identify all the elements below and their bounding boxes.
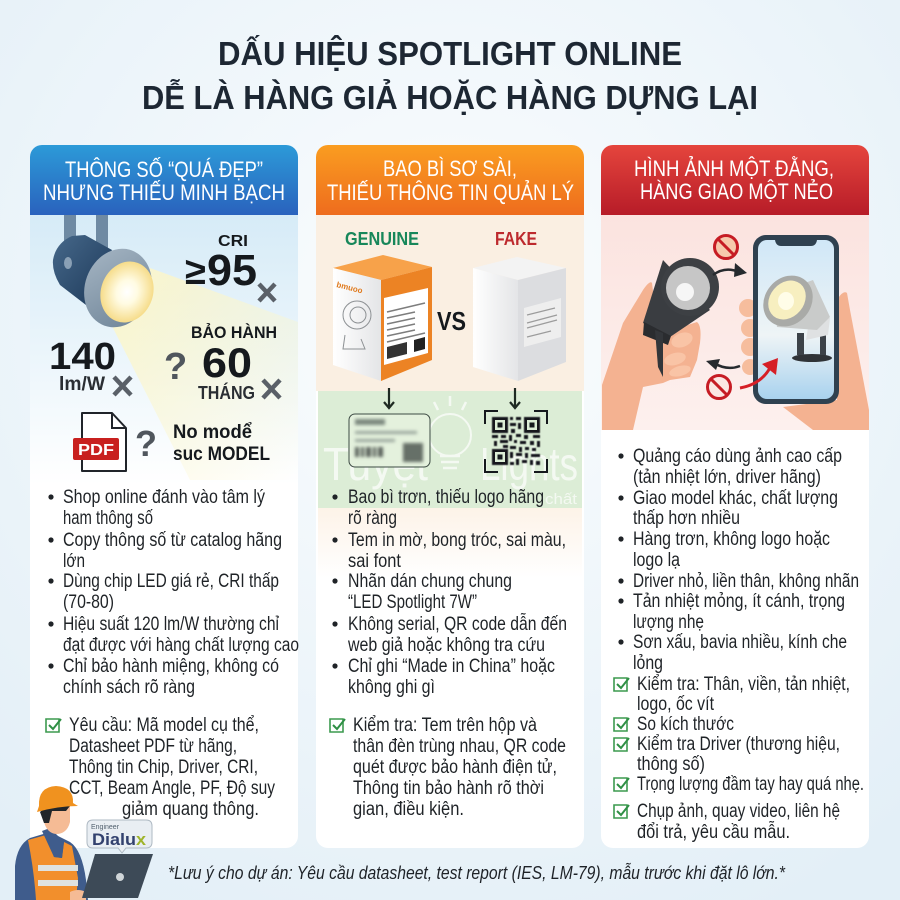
panel: thông số quá đẹp: [30, 145, 299, 848]
panel 3 bullet list: Quảng cáo dùng ảnh cao cấp: [633, 446, 842, 467]
warranty spec: BẢO HÀNH: [191, 323, 277, 342]
panel 3 bullet list: lỏng: [633, 653, 663, 674]
panel 2 check list: gian, điều kiện.: [353, 799, 464, 820]
panel 1 bullet list: [48, 487, 299, 698]
CRI spec: [185, 233, 275, 301]
efficacy spec: [49, 336, 131, 395]
label: genuine: GENUINE: [345, 229, 419, 249]
blurred label: [349, 414, 430, 467]
warranty spec: ?: [164, 346, 187, 388]
panel 2 header: [316, 145, 584, 215]
panel 3 check list: thông số): [637, 754, 705, 775]
panel 1 requirement checklist: Yêu cầu: Mã model cụ thể,: [69, 715, 259, 736]
panel 3 check list: So kích thước: [637, 714, 734, 735]
panel 2 bullet list: sai font: [348, 551, 402, 572]
panel 3 header: [601, 145, 869, 215]
panel 3 bullet list: logo lạ: [633, 550, 680, 571]
illustration: phone with product photo: [739, 235, 869, 430]
panel 3 check list: Kiểm tra: Thân, viền, tản nhiệt,: [637, 674, 850, 695]
efficacy spec: 140: [49, 336, 116, 378]
panel 1 bullet list: đạt được với hàng chất lượng cao: [63, 635, 299, 656]
text: VS: VS: [437, 306, 466, 336]
warranty spec: 60: [202, 339, 252, 386]
fake box: [473, 257, 566, 381]
watermark: [323, 396, 578, 508]
panel 3 bullet list: [618, 446, 859, 674]
panel 1 bullet list: ham thông số: [63, 508, 153, 529]
panel 3 bullet list: thấp hơn nhiều: [633, 508, 740, 529]
panel 2 bullet list: Nhãn dán chung chung: [348, 571, 512, 592]
panel 1 bullet list: Shop online đánh vào tâm lý: [63, 487, 265, 508]
panel 2 check list: Thông tin bảo hành rõ thời: [353, 778, 544, 799]
panel 2 check list: thân đèn trùng nhau, QR code: [353, 736, 566, 757]
panel 2 bullet list: Bao bì trơn, thiếu logo hãng: [348, 487, 544, 508]
panel 1 header: THÔNG SỐ “QUÁ ĐẸP”: [65, 156, 263, 182]
footer note: *Lưu ý cho dự án: Yêu cầu datasheet, test report (IES, LM-79), mẫu trước khi đặt lô lớn.*: [168, 863, 786, 883]
Dialux badge: Dialux: [92, 830, 147, 849]
panel 2 header: BAO BÌ SƠ SÀI,: [383, 156, 517, 181]
panel 2 check list: [330, 715, 566, 820]
panel 3 check list: [614, 674, 864, 843]
title: [142, 35, 758, 116]
panel 3 bullet list: Hàng trơn, không logo hoặc: [633, 529, 830, 550]
panel 1 bullet list: chính sách rõ ràng: [63, 677, 195, 698]
panel 3 check list: Chụp ảnh, quay video, liên hệ: [637, 801, 840, 822]
QR code: [485, 411, 547, 472]
panel 2 header: THIẾU THÔNG TIN QUẢN LÝ: [327, 180, 574, 205]
panel: bao bì sơ sài: [316, 145, 584, 848]
panel 1 requirement checklist: [46, 715, 275, 820]
genuine box: bmuoo: [336, 280, 364, 295]
arrow: black back to hand: [706, 359, 740, 370]
panel 1 bullet list: Hiệu suất 120 lm/W thường chỉ: [63, 614, 280, 635]
panel 2 bullet list: Không serial, QR code dẫn đến: [348, 613, 567, 635]
panel 3 header: HÌNH ẢNH MỘT ĐẰNG,: [634, 156, 834, 181]
panel 2 check list: Kiểm tra: Tem trên hộp và: [353, 715, 537, 736]
watermark: chất: [545, 491, 578, 508]
arrow: fake down: [510, 388, 520, 408]
laptop logo dot: [116, 873, 124, 881]
panel 2 bullet list: Tem in mờ, bong tróc, sai màu,: [348, 530, 566, 551]
panel 1 bullet list: Copy thông số từ catalog hãng: [63, 530, 282, 551]
panel 1 requirement checklist: CCT, Beam Angle, PF, Độ suy: [69, 778, 275, 799]
arrow: red to phone image: [740, 358, 778, 388]
CRI spec: ≥: [185, 251, 206, 293]
title: DỄ LÀ HÀNG GIẢ HOẶC HÀNG DỰNG LẠI: [142, 79, 758, 116]
icon: spotlight with light beam: [53, 215, 298, 480]
illustration: hand holding real spotlight: [602, 258, 719, 430]
missing model note: [135, 422, 270, 465]
panel 2 bullet list: “LED Spotlight 7W”: [348, 592, 477, 613]
label: fake: FAKE: [495, 229, 537, 249]
warranty spec: THÁNG: [198, 382, 255, 403]
icon: prohibition sign top: [714, 236, 738, 258]
panel 3 bullet list: Sơn xấu, bavia nhiều, kính che: [633, 632, 847, 653]
panel 3 check list: đổi trả, yêu cầu mẫu.: [637, 821, 790, 843]
panel 3 check list: Kiểm tra Driver (thương hiệu,: [637, 734, 840, 755]
panel 3 bullet list: Giao model khác, chất lượng: [633, 488, 838, 509]
panel: hình ảnh một đằng: [601, 145, 869, 848]
arrow: black to phone: [713, 263, 747, 277]
icon: PDF document: [73, 413, 126, 471]
panel 1 bullet list: Chỉ bảo hành miệng, không có: [63, 656, 279, 677]
panel 1 requirement checklist: giảm quang thông.: [122, 799, 259, 820]
panel 2 bullet list: rõ ràng: [348, 508, 397, 529]
missing model note: suc MODEL: [173, 444, 270, 465]
panel 2 check list: quét được bảo hành điện tử,: [353, 757, 557, 778]
arrow: genuine down: [384, 388, 394, 408]
panel 3 bullet list: Tản nhiệt mỏng, ít cánh, trọng: [633, 591, 845, 612]
laptop: [82, 854, 153, 898]
icon: PDF document: PDF: [78, 442, 114, 459]
panel 2 bullet list: Chỉ ghi “Made in China” hoặc: [348, 656, 555, 677]
panel 1 requirement checklist: Datasheet PDF từ hãng,: [69, 736, 237, 757]
panel 1 bullet list: Dùng chip LED giá rẻ, CRI thấp: [63, 571, 279, 592]
CRI spec: 95: [207, 246, 257, 295]
panel 1 header: [30, 145, 298, 215]
icon: prohibition sign bottom: [708, 376, 730, 398]
missing model note: ?: [135, 423, 157, 464]
panel 3 bullet list: lượng nhẹ: [633, 612, 704, 633]
watermark: Lights: [480, 438, 578, 490]
genuine box: [333, 255, 432, 381]
panel 1 bullet list: (70-80): [63, 592, 114, 613]
panel 1 bullet list: lớn: [63, 551, 85, 572]
panel 1 header: NHƯNG THIẾU MINH BẠCH: [43, 180, 285, 205]
CRI spec: CRI: [218, 233, 248, 250]
watermark: Tuyệt: [323, 438, 428, 490]
missing model note: No modể: [173, 422, 252, 443]
panel 2 bullet list: không ghi gì: [348, 677, 435, 698]
panel 2 bullet list: [332, 487, 567, 698]
panel 3 bullet list: (tản nhiệt lớn, driver hãng): [633, 467, 821, 488]
Dialux badge: [87, 820, 152, 853]
panel 3 check list: logo, ốc vít: [637, 694, 715, 715]
efficacy spec: lm/W: [59, 374, 105, 395]
panel 2 bullet list: web giả hoặc không tra cứu: [347, 635, 545, 656]
panel 3 header: HÀNG GIAO MỘT NẺO: [640, 179, 833, 204]
engineer with laptop: [15, 786, 153, 900]
warranty spec: [164, 323, 280, 403]
panel 1 requirement checklist: Thông tin Chip, Driver, CRI,: [69, 757, 258, 778]
title: DẤU HIỆU SPOTLIGHT ONLINE: [218, 35, 682, 72]
Dialux badge: Engineer: [91, 824, 120, 831]
